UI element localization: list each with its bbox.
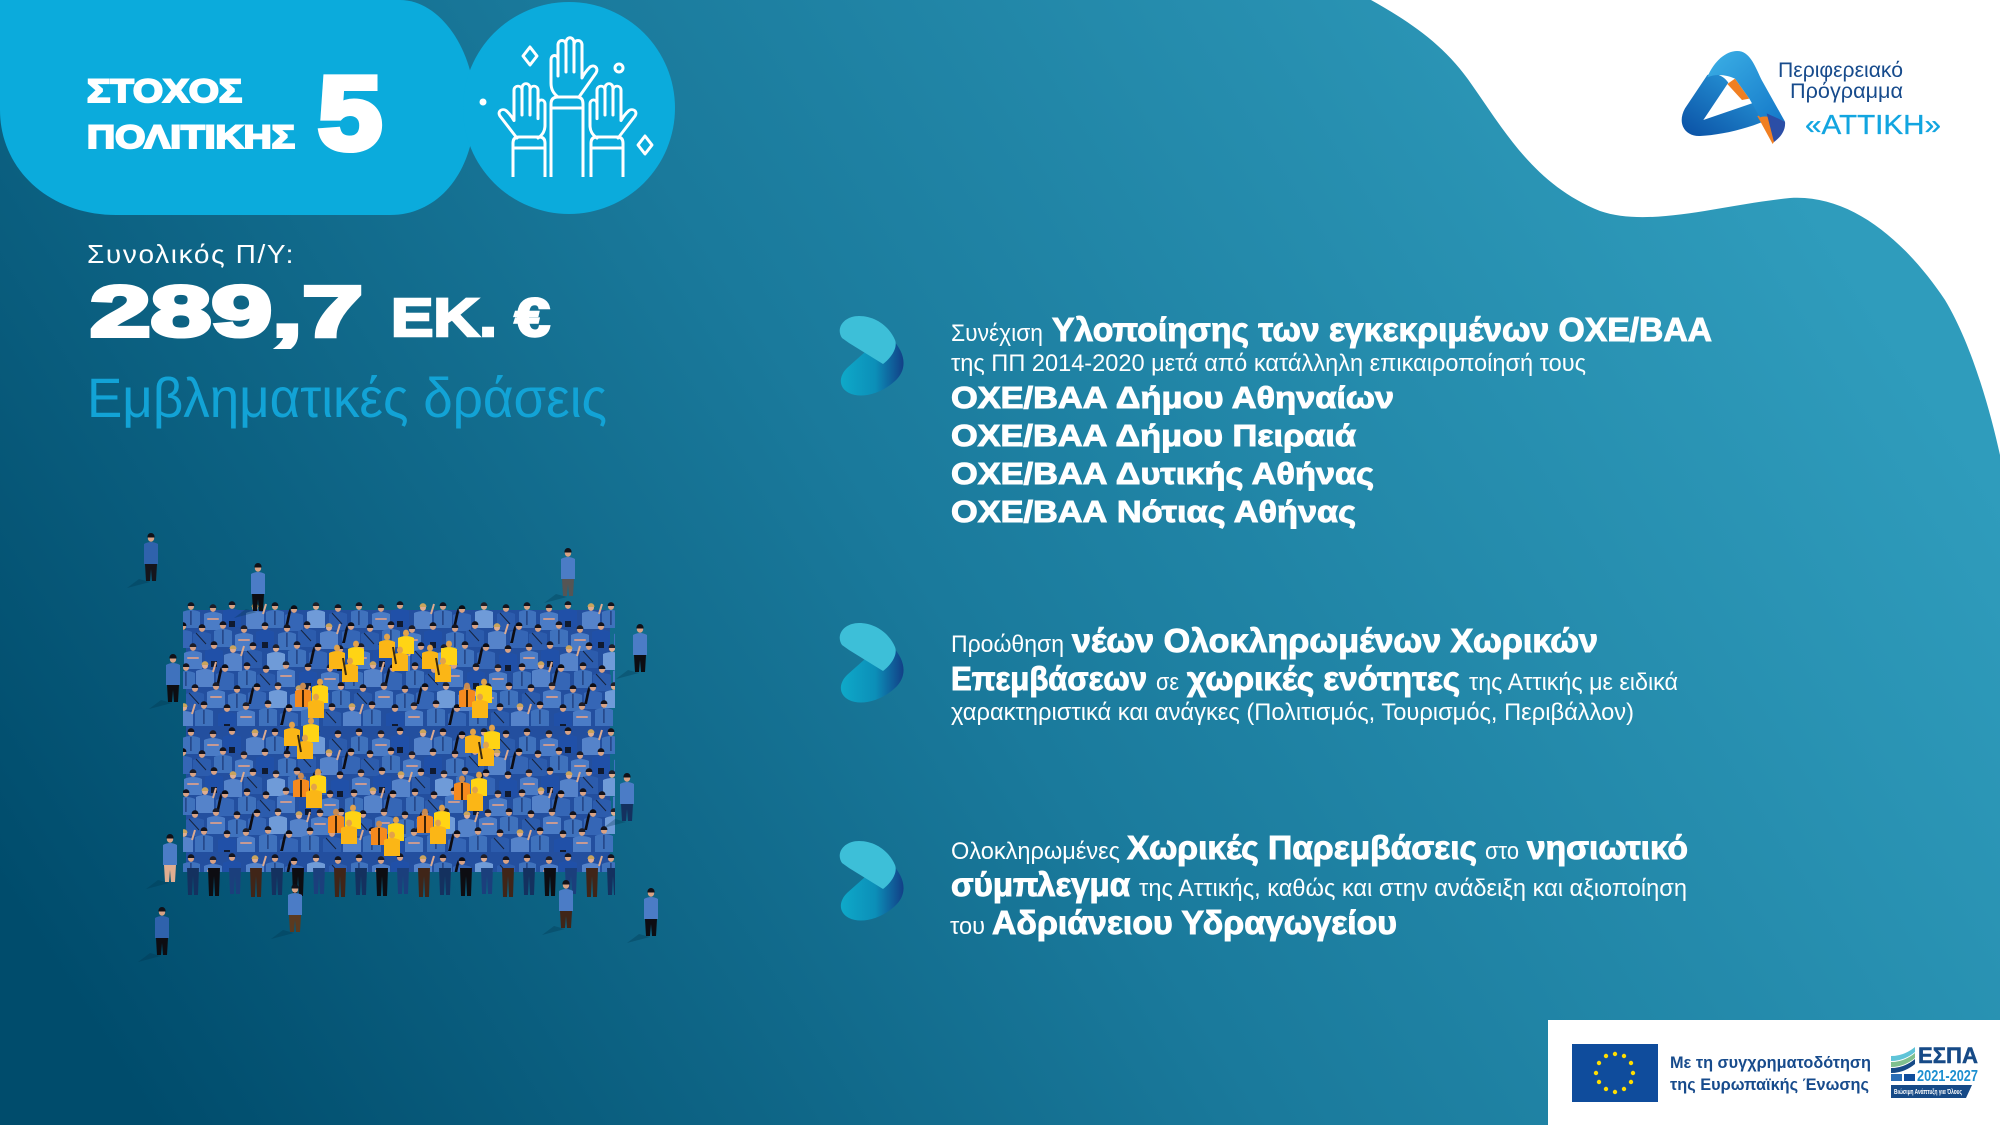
text block 2 bbox=[951, 622, 1678, 726]
text block 3: Ολοκληρωμένες bbox=[951, 838, 1120, 865]
text block 3: του bbox=[950, 913, 985, 940]
logo: ESPA 2021-2027: ΕΣΠΑ bbox=[1918, 1043, 1978, 1068]
icon: EU flag bbox=[1572, 1044, 1658, 1102]
co-funding text: της Ευρωπαϊκής Ένωσης bbox=[1670, 1075, 1869, 1094]
flagship actions heading: Εμβληματικές δράσεις bbox=[87, 366, 607, 429]
text block 2: νέων Ολοκληρωμένων Χωρικών bbox=[1072, 622, 1598, 659]
logo: ESPA 2021-2027 bbox=[1891, 1043, 1978, 1098]
text block 3: σύμπλεγμα bbox=[951, 866, 1130, 903]
budget amount bbox=[90, 273, 550, 352]
goal pill bbox=[0, 0, 475, 215]
budget label: Συνολικός Π/Υ: bbox=[87, 239, 295, 269]
text block 1: ΟΧΕ/ΒΑΑ Νότιας Αθήνας bbox=[951, 494, 1356, 529]
goal heading bbox=[87, 73, 295, 155]
co-funding text bbox=[1670, 1053, 1871, 1094]
text block 3 bbox=[950, 829, 1688, 941]
text block 3: Χωρικές Παρεμβάσεις bbox=[1127, 829, 1477, 866]
text block 2: Επεμβάσεων bbox=[951, 660, 1147, 697]
goal number: 5 bbox=[318, 56, 382, 172]
footer: EU co-funding panel bbox=[1548, 1020, 2000, 1125]
budget amount: ΕΚ. € bbox=[391, 288, 550, 348]
standing people around crowd bbox=[127, 533, 658, 962]
text block 2: χαρακτηριστικά και ανάγκες (Πολιτισμός, Τουρισμός, Περιβάλλον) bbox=[951, 699, 1634, 726]
text block 1: ΟΧΕ/ΒΑΑ Δήμου Αθηναίων bbox=[951, 380, 1394, 415]
text block 3: στο bbox=[1485, 838, 1519, 865]
logo: Attica regional programme: Πρόγραμμα bbox=[1790, 80, 1903, 103]
text block 3: Αδριάνειου Υδραγωγείου bbox=[992, 904, 1397, 941]
logo: Attica regional programme bbox=[1682, 51, 1941, 144]
text block 3: της Αττικής, καθώς και στην ανάδειξη και αξιοποίηση bbox=[1139, 875, 1687, 902]
logo: ESPA 2021-2027: Βιώσιμη Ανάπτυξη για Όλους bbox=[1894, 1088, 1962, 1096]
white wave top right bbox=[1371, 0, 2000, 455]
logo mark bbox=[1682, 51, 1785, 144]
goal heading: ΠΟΛΙΤΙΚΗΣ bbox=[87, 119, 295, 155]
text block 1: ΟΧΕ/ΒΑΑ Δυτικής Αθήνας bbox=[951, 456, 1374, 491]
icon: raised hands bbox=[463, 2, 675, 214]
text block 1: Συνέχιση bbox=[951, 320, 1043, 347]
logo: ESPA 2021-2027: 2021-2027 bbox=[1917, 1068, 1978, 1085]
icon: chevron 3 bbox=[840, 841, 904, 921]
text block 3: νησιωτικό bbox=[1527, 829, 1688, 866]
goal heading: ΣΤΟΧΟΣ bbox=[87, 73, 242, 109]
text block 1 bbox=[951, 311, 1712, 529]
text block 2: σε bbox=[1156, 669, 1179, 696]
text block 1: της ΠΠ 2014-2020 μετά από κατάλληλη επικαιροποίησή τους bbox=[951, 350, 1586, 377]
text block 2: Προώθηση bbox=[951, 631, 1064, 658]
icon: chevron 1 bbox=[840, 316, 904, 396]
text block 2: χωρικές ενότητες bbox=[1187, 660, 1460, 697]
co-funding text: Με τη συγχρηματοδότηση bbox=[1670, 1053, 1871, 1072]
crowd forming EU flag bbox=[183, 600, 615, 898]
logo: Attica regional programme: Περιφερειακό bbox=[1778, 59, 1903, 82]
budget amount: 289,7 bbox=[90, 273, 363, 352]
text block 1: Υλοποίησης των εγκεκριμένων ΟΧΕ/ΒΑΑ bbox=[1052, 311, 1712, 348]
text block 1: ΟΧΕ/ΒΑΑ Δήμου Πειραιά bbox=[951, 418, 1356, 453]
text block 2: της Αττικής με ειδικά bbox=[1469, 669, 1678, 696]
icon: chevron 2 bbox=[840, 623, 904, 703]
logo: Attica regional programme: «ΑΤΤΙΚΗ» bbox=[1805, 109, 1941, 140]
